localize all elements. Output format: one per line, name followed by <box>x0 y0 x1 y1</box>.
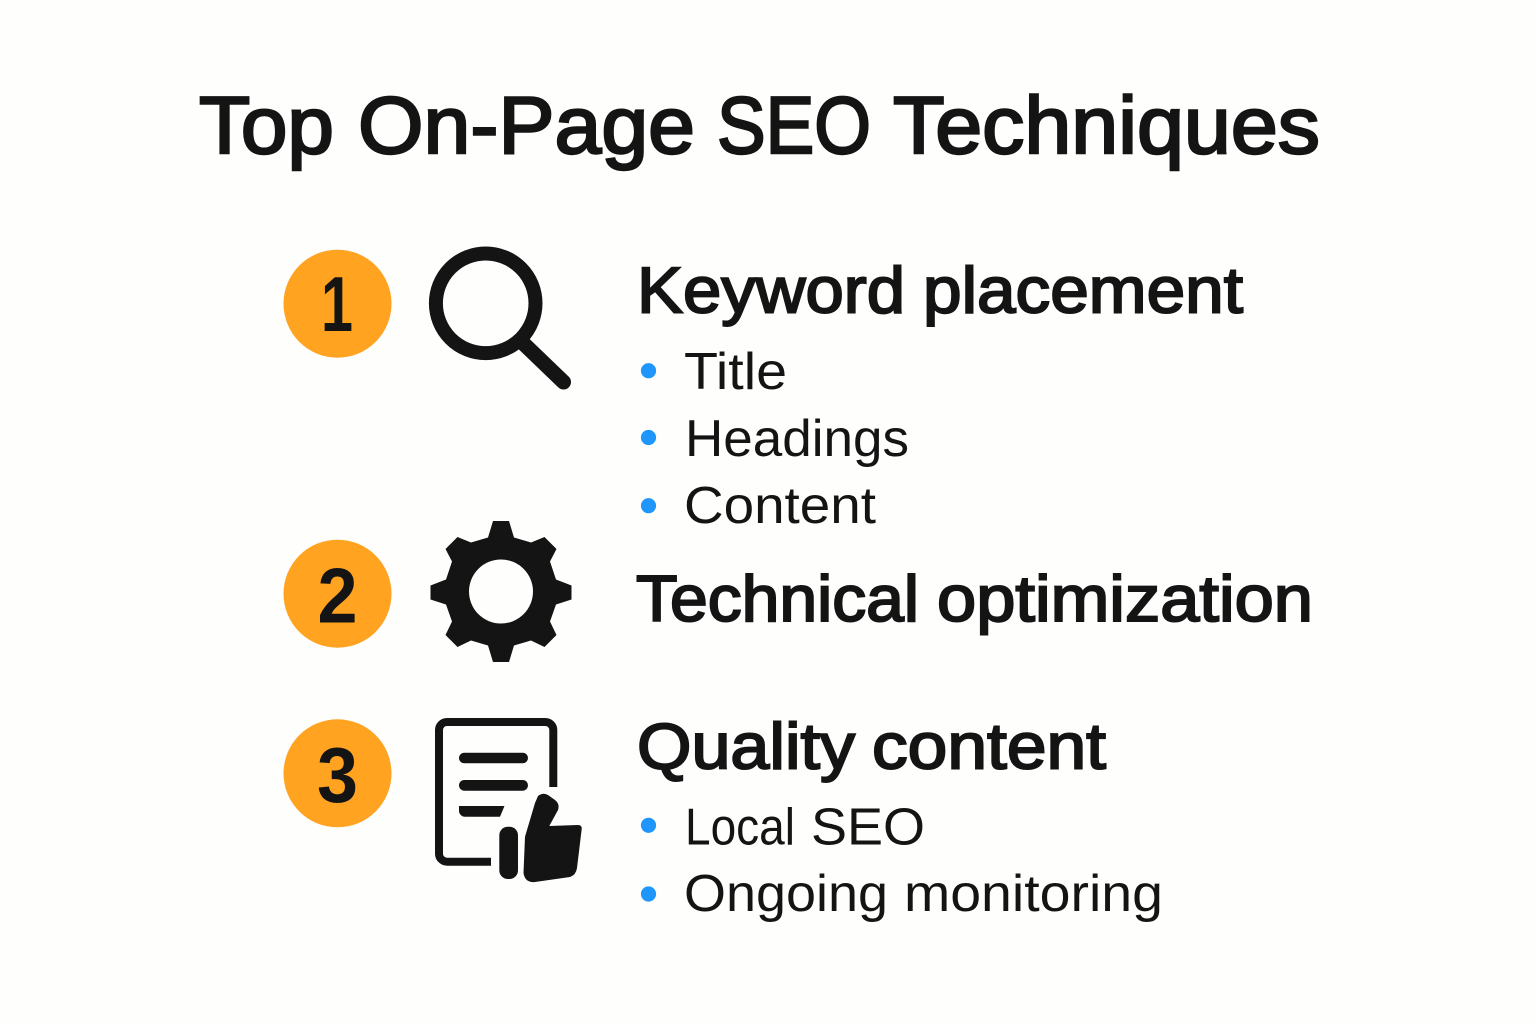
title: SEO <box>717 81 871 171</box>
bullet list: keyword placement <box>641 343 909 535</box>
bullet list: keyword placement: Title <box>684 343 787 401</box>
number badge 1 <box>284 250 392 358</box>
heading: technical optimization: optimization <box>937 562 1313 635</box>
heading: keyword placement <box>637 254 1243 326</box>
panel: technical optimization <box>284 521 1313 662</box>
heading: technical optimization <box>636 562 1313 635</box>
bullet list: quality content <box>641 798 1163 923</box>
number badge 3: 3 <box>317 731 358 819</box>
bullet list: keyword placement: Headings <box>685 410 909 468</box>
number badge 2 <box>284 540 392 648</box>
icon: magnifying glass <box>436 253 564 382</box>
title: Techniques <box>893 81 1320 171</box>
title <box>199 81 1320 171</box>
number badge 2: 2 <box>318 552 358 640</box>
heading: quality content: content <box>872 710 1106 782</box>
number badge 3 <box>284 719 392 827</box>
title: On-Page <box>358 81 695 171</box>
icon: document with thumbs up <box>439 722 582 882</box>
panel: quality content <box>284 710 1163 923</box>
bullet list: keyword placement: Content <box>684 477 877 535</box>
heading: quality content: Quality <box>637 710 856 782</box>
number badge 1: 1 <box>321 260 353 348</box>
heading: quality content <box>637 710 1106 782</box>
bullet list: quality content: monitoring <box>904 865 1163 923</box>
icon: gear <box>430 521 572 662</box>
bullet list: quality content: Local <box>685 798 795 856</box>
heading: keyword placement: Keyword <box>637 254 905 326</box>
heading: technical optimization: Technical <box>636 562 919 635</box>
heading: keyword placement: placement <box>923 254 1243 326</box>
panel: keyword placement <box>284 250 1243 535</box>
bullet list: quality content: Ongoing <box>684 865 888 923</box>
title: Top <box>199 81 334 171</box>
bullet list: quality content: SEO <box>811 798 925 856</box>
